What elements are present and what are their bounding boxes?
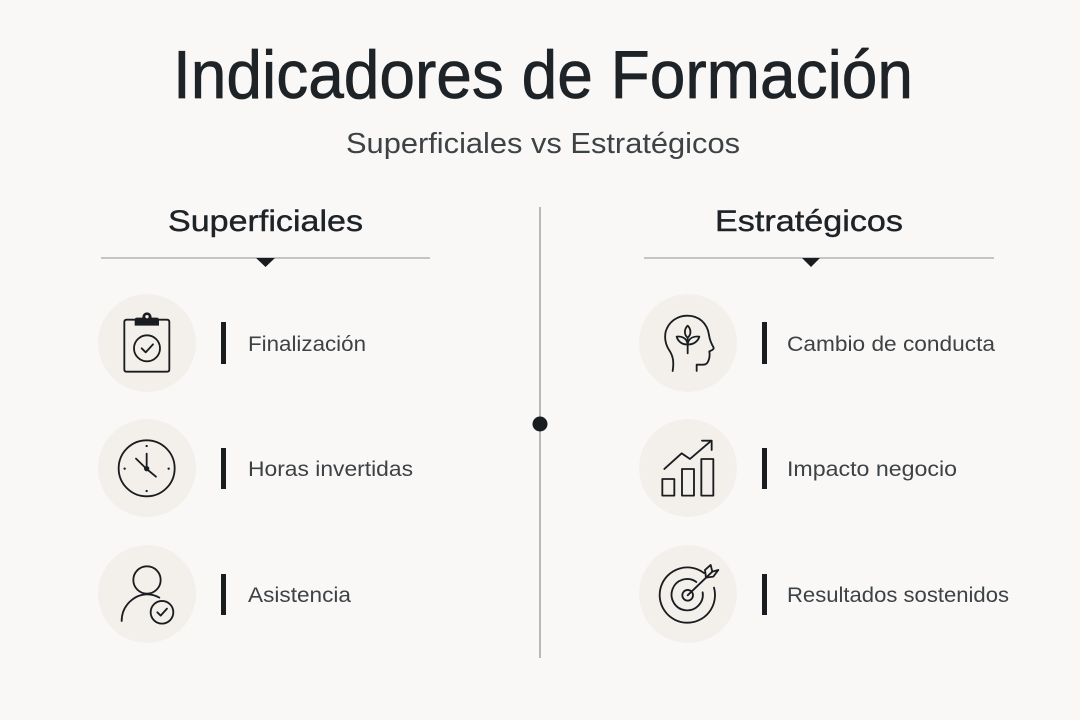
item: impacto negocio [639, 419, 957, 517]
label: Horas invertidas [248, 458, 413, 481]
label: Cambio de conducta [787, 333, 995, 356]
icon: person with check [98, 545, 196, 643]
subtitle: Superficiales vs Estratégicos [346, 128, 740, 160]
icon: clock [98, 419, 196, 517]
icon: rising bar chart [639, 419, 737, 517]
heading rule with pointer [644, 258, 994, 267]
separator bar [221, 574, 226, 615]
item: resultados sostenidos [639, 545, 1009, 643]
central divider with dot [532, 207, 548, 658]
label: Impacto negocio [787, 458, 957, 481]
panel: superficiales [98, 205, 430, 643]
item: cambio de conducta [639, 294, 995, 392]
icon: head with sprout [639, 294, 737, 392]
item: horas invertidas [98, 419, 413, 517]
icon: clipboard with check [98, 294, 196, 392]
title: Indicadores de Formación [173, 37, 913, 113]
separator bar [762, 448, 767, 489]
label: Asistencia [248, 584, 351, 607]
item: finalización [98, 294, 366, 392]
separator bar [762, 574, 767, 615]
panel: estratégicos [639, 205, 1009, 643]
label: Finalización [248, 333, 366, 356]
icon: target with arrow [639, 545, 737, 643]
label: Resultados sostenidos [787, 584, 1009, 607]
heading: superficiales: Superficiales [168, 205, 363, 238]
item: asistencia [98, 545, 351, 643]
heading rule with pointer [101, 258, 430, 267]
separator bar [762, 322, 767, 364]
separator bar [221, 448, 226, 489]
heading: estratégicos: Estratégicos [715, 205, 903, 238]
separator bar [221, 322, 226, 364]
